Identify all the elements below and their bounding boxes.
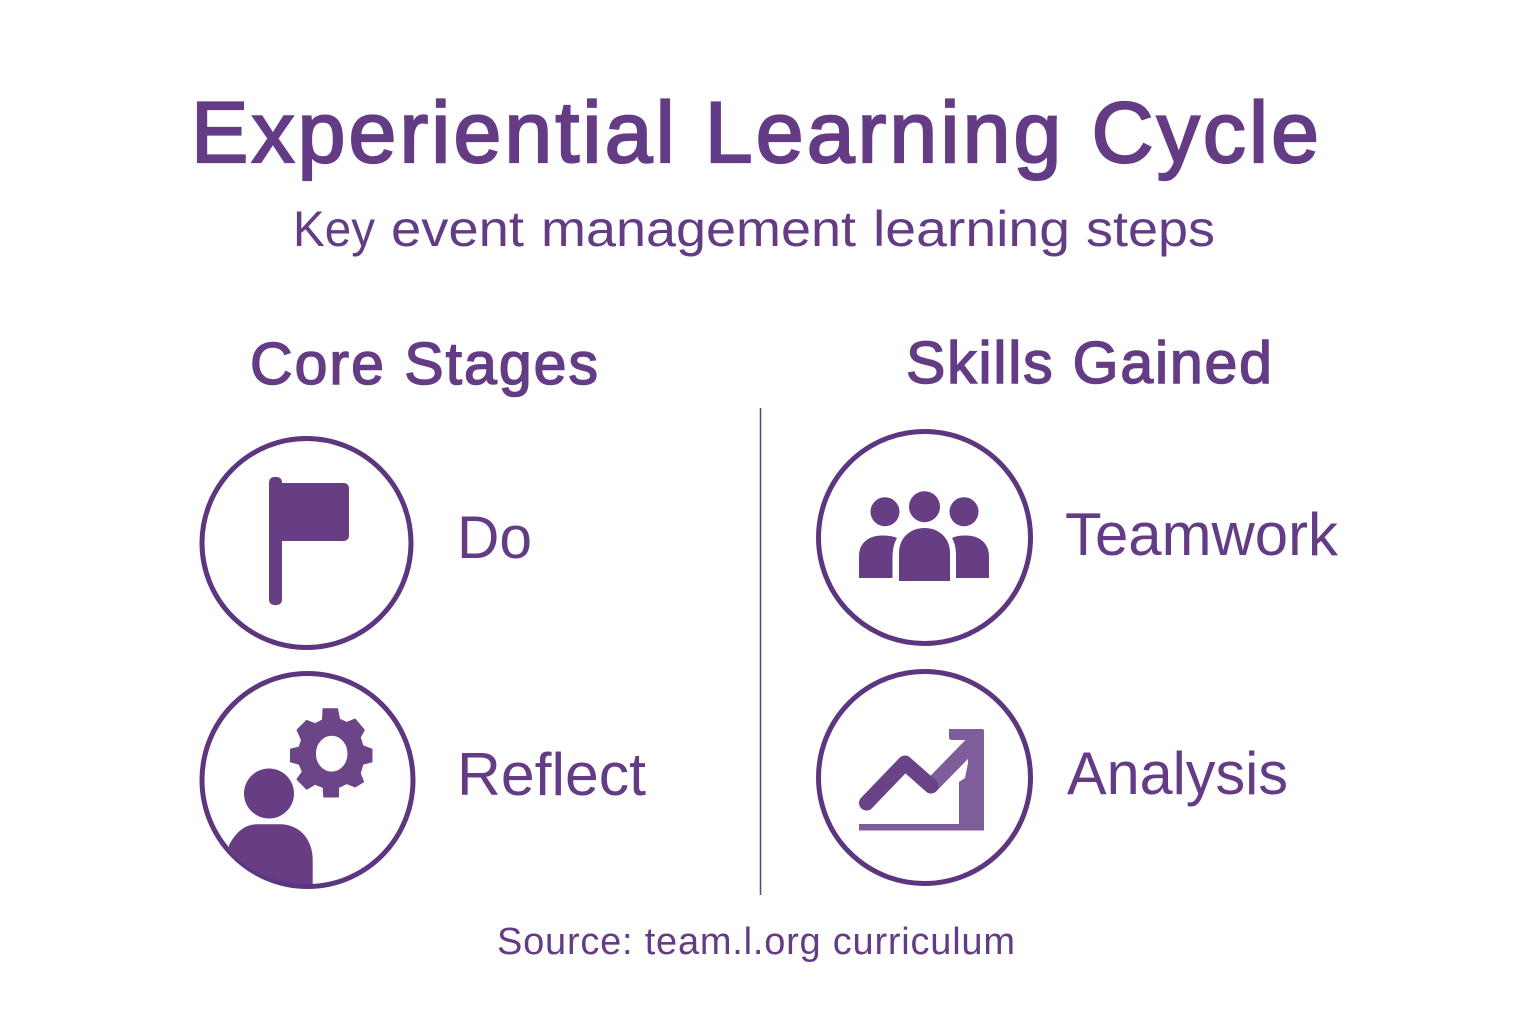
source note: Source: team.l.org curriculum	[497, 921, 1015, 963]
label: do: Do	[457, 504, 532, 571]
icon: person with gear	[202, 674, 413, 886]
label: analysis: Analysis	[1067, 740, 1288, 807]
subtitle: event	[391, 201, 524, 257]
subtitle	[293, 201, 1215, 257]
label: reflect: Reflect	[457, 741, 646, 808]
heading: core stages: Core Stages	[250, 331, 598, 397]
subtitle: steps	[1086, 201, 1215, 257]
heading: skills gained: Skills Gained	[906, 330, 1272, 396]
icon: rising chart arrow	[818, 672, 1030, 884]
subtitle: management	[541, 201, 856, 257]
item: reflect	[202, 674, 646, 886]
icon: flag	[202, 438, 411, 648]
subtitle: learning	[873, 201, 1070, 257]
item: teamwork	[818, 432, 1339, 644]
label: teamwork: Teamwork	[1065, 501, 1339, 568]
item: do	[202, 438, 532, 648]
subtitle: Key	[293, 201, 375, 257]
icon: team of three people	[818, 432, 1030, 644]
item: analysis	[818, 672, 1288, 884]
title: Experiential Learning Cycle	[191, 85, 1319, 181]
